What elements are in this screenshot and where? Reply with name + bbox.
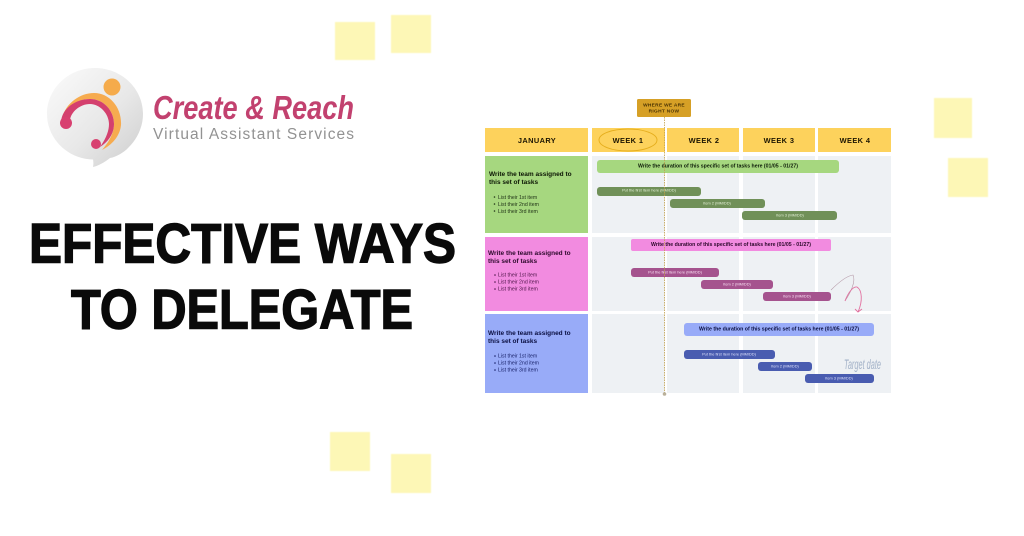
panel: green team: List their 1st item [498,195,537,201]
sticky notes [330,15,988,493]
panel: blue team: this set of tasks [488,338,538,345]
title [29,212,456,340]
header row: WEEK 1 [613,136,643,145]
panel: pink team: List their 3rd item [498,286,538,292]
panel: green team: List their 2nd item [498,202,539,208]
panel: pink team: this set of tasks [488,258,538,265]
blue bars: Item 3 (MM/DD) [825,376,854,380]
panel: green team: Write the team assigned to [489,171,572,178]
arrow: hand-drawn pink [831,275,862,312]
pink bars [631,239,831,301]
header row: WEEK 2 [689,136,719,145]
gantt chart [485,99,891,396]
blue bars: Put the first item here (MM/DD) [702,352,757,356]
panel: pink team [485,237,588,311]
header row: WEEK 3 [764,136,794,145]
logo tagline: Virtual Assistant Services [153,126,354,143]
blue bars [684,323,874,383]
panel: blue team: List their 1st item [498,354,537,360]
pink bars: Item 3 (MM/DD) [783,294,812,298]
marker: where we are right now: RIGHT NOW [649,108,680,114]
pink bars: Item 2 (MM/DD) [723,282,752,286]
panel: pink team: List their 1st item [498,272,537,278]
week column backgrounds [592,156,891,393]
icon: logo speech bubble [47,68,143,167]
marker: where we are right now: WHERE WE ARE [643,102,685,108]
panel: blue team: Write the team assigned to [488,330,571,337]
panel: blue team: List their 3rd item [498,368,538,374]
green bars: Item 2 (MM/DD) [703,200,732,206]
panel: green team: this set of tasks [489,179,539,186]
panel: blue team [485,314,588,393]
green bars: Put the first item here (MM/DD) [622,188,677,192]
pink bars: Put the first item here (MM/DD) [648,270,703,274]
header row: WEEK 4 [840,136,871,145]
panel: blue team: List their 2nd item [498,360,539,366]
header row [485,128,891,152]
marker: where we are right now [637,99,691,117]
now line [663,117,666,396]
panel: pink team: List their 2nd item [498,280,539,286]
title: EFFECTIVE WAYS [29,212,456,274]
green bars [597,160,839,220]
blue bars: Item 2 (MM/DD) [771,364,800,368]
logo [47,68,354,167]
header row: JANUARY [518,136,556,145]
pink bars: Write the duration of this specific set of tasks here (01/05 - 01/27) [651,242,811,248]
panel: green team [485,156,588,233]
title: TO DELEGATE [71,278,413,340]
green bars: Item 3 (MM/DD) [776,212,805,218]
signature: target date: Target date [844,356,881,372]
logo name: Create & Reach [153,89,354,126]
panel: green team: List their 3rd item [498,209,538,215]
green bars: Write the duration of this specific set of tasks here (01/05 - 01/27) [638,164,798,170]
panel: pink team: Write the team assigned to [488,250,571,257]
blue bars: Write the duration of this specific set of tasks here (01/05 - 01/27) [699,326,859,332]
